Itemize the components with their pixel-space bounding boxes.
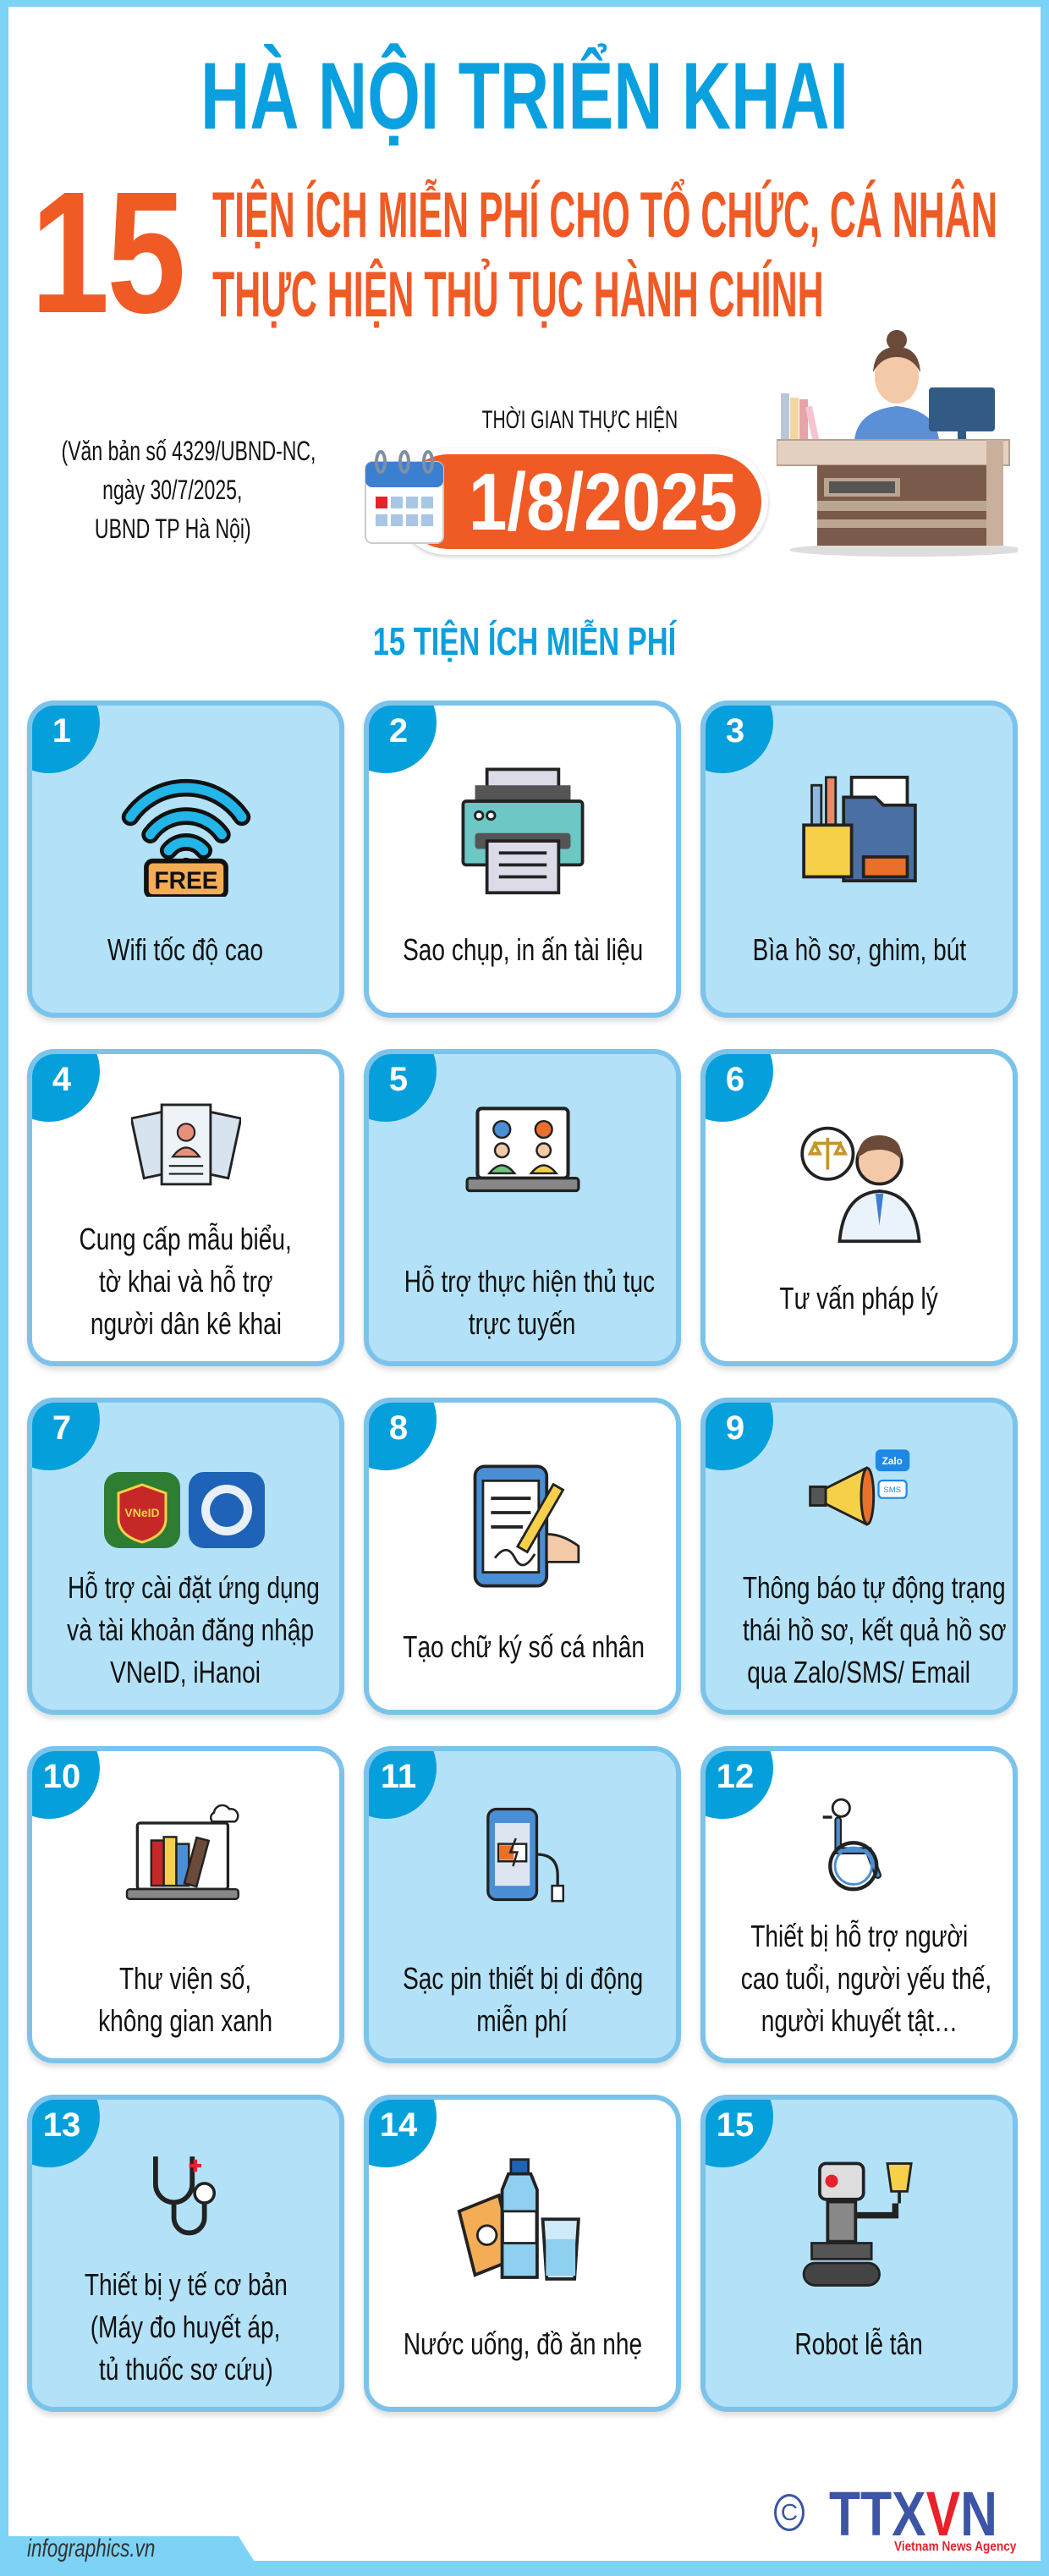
- card 14: [364, 2095, 681, 2412]
- card 13: 13: [43, 2106, 80, 2144]
- icon: apps VNeID iHanoi: VNeID: [124, 1506, 160, 1519]
- note: document reference: UBND TP Hà Nội): [95, 514, 250, 544]
- card 1: 1: [52, 712, 71, 750]
- logo: TTXVN: [774, 2479, 1017, 2554]
- icon: wifi free: FREE: [154, 867, 218, 894]
- label: và tài khoản đăng nhập: [67, 1612, 314, 1647]
- card 7: [27, 1398, 344, 1715]
- label: Thông báo tự động trạng: [743, 1570, 1006, 1605]
- icon: megaphone zalo sms: SMS: [883, 1486, 901, 1495]
- label: implementation time: THỜI GIAN THỰC HIỆN: [482, 406, 678, 434]
- illustration: receptionist at desk: [777, 330, 1018, 557]
- card 12: 12: [717, 1758, 754, 1795]
- label: Wifi tốc độ cao: [107, 932, 264, 967]
- label: trực tuyến: [469, 1306, 576, 1341]
- label: Thiết bị hỗ trợ người: [750, 1919, 968, 1953]
- card 8: 8: [389, 1409, 408, 1447]
- logo: TTXVN: TTXVN: [829, 2479, 997, 2549]
- label: tủ thuốc sơ cứu): [99, 2352, 272, 2387]
- card 7: 7: [52, 1409, 71, 1447]
- subtitle: [212, 179, 997, 331]
- card 3: 3: [726, 712, 744, 750]
- label: [98, 1961, 273, 2038]
- icon: phone charging: [486, 1807, 564, 1902]
- icon: forms: [131, 1103, 241, 1186]
- icon: digital library: [125, 1804, 239, 1900]
- date pill: 1/8/2025: [469, 457, 738, 547]
- label: Sao chụp, in ấn tài liệu: [403, 932, 643, 967]
- label: thái hồ sơ, kết quả hồ sơ: [743, 1612, 1007, 1647]
- icon: megaphone zalo sms: [809, 1449, 910, 1526]
- label: VNeID, iHanoi: [111, 1655, 261, 1689]
- label: [403, 1961, 643, 2038]
- note: document reference: ngày 30/7/2025,: [102, 475, 243, 505]
- label: Robot lễ tân: [795, 2326, 923, 2361]
- label: Cung cấp mẫu biểu,: [80, 1222, 292, 1256]
- card 15: [700, 2095, 1018, 2412]
- card 4: 4: [52, 1061, 71, 1098]
- card 9: 9: [726, 1409, 744, 1447]
- big number 15: 15: [30, 156, 183, 349]
- card 2: 2: [389, 712, 408, 750]
- note: document reference: [62, 436, 316, 544]
- label: cao tuổi, người yếu thế,: [741, 1961, 991, 1996]
- label: Sạc pin thiết bị di động: [403, 1961, 643, 1996]
- section heading: 15 TIỆN ÍCH MIỄN PHÍ: [373, 619, 676, 663]
- icon: stethoscope: [153, 2156, 216, 2235]
- icon: megaphone zalo sms: Zalo: [882, 1456, 903, 1467]
- subtitle: THỰC HIỆN THỦ TỤC HÀNH CHÍNH: [212, 259, 824, 331]
- label: tờ khai và hỗ trợ: [99, 1264, 272, 1299]
- card 4: [27, 1049, 344, 1366]
- label: [743, 1570, 1007, 1689]
- date pill: [394, 448, 768, 555]
- card 15: 15: [717, 2106, 754, 2144]
- label: Nước uống, đồ ăn nhẹ: [403, 2326, 642, 2361]
- label: (Máy đo huyết áp,: [91, 2310, 281, 2344]
- footer tab: infographics.vn: [8, 2536, 255, 2563]
- label: người khuyết tật…: [761, 2003, 958, 2038]
- card 5: [364, 1049, 681, 1366]
- label: miễn phí: [477, 2003, 568, 2038]
- icon: digital signature: [474, 1465, 580, 1587]
- label: Thiết bị y tế cơ bản: [84, 2267, 288, 2302]
- card 14: 14: [380, 2106, 417, 2144]
- icon: folder pens: [802, 775, 917, 882]
- icon: printer: [462, 768, 584, 895]
- card 11: [364, 1746, 681, 2063]
- label: Tư vấn pháp lý: [780, 1281, 938, 1315]
- label: [84, 2267, 288, 2387]
- label: không gian xanh: [98, 2003, 273, 2038]
- label: [741, 1919, 991, 2038]
- footer tab: infographics.vn: infographics.vn: [27, 2535, 155, 2562]
- card 10: 10: [43, 1758, 80, 1795]
- icon: reception robot: [802, 2162, 913, 2287]
- icon: wheelchair: [822, 1799, 881, 1892]
- icon: wifi free: [122, 778, 250, 897]
- icon: laptop online: [465, 1107, 580, 1193]
- label: Hỗ trợ cài đặt ứng dụng: [68, 1570, 320, 1605]
- card 1: [27, 700, 344, 1018]
- card 10: [27, 1746, 344, 2063]
- card 11: 11: [381, 1758, 416, 1795]
- icon: calendar: [365, 450, 444, 544]
- label: [404, 1264, 655, 1341]
- card 9: [700, 1398, 1018, 1715]
- card 6: [700, 1049, 1018, 1366]
- card 8: [364, 1398, 681, 1715]
- icon: legal advisor: [800, 1127, 921, 1244]
- card 6: 6: [726, 1061, 744, 1098]
- label: người dân kê khai: [90, 1306, 282, 1341]
- label: Tạo chữ ký số cá nhân: [403, 1629, 645, 1664]
- icon: water and snacks: [457, 2158, 580, 2281]
- card 13: [27, 2095, 344, 2412]
- label: Thư viện số,: [119, 1961, 252, 1996]
- label: [80, 1222, 292, 1341]
- icon: apps VNeID iHanoi: [104, 1472, 265, 1548]
- card 5: 5: [389, 1061, 408, 1098]
- title: HÀ NỘI TRIỂN KHAI: [200, 43, 849, 149]
- note: document reference: (Văn bản số 4329/UBND-NC,: [62, 436, 316, 466]
- subtitle: TIỆN ÍCH MIỄN PHÍ CHO TỔ CHỨC, CÁ NHÂN: [212, 179, 997, 251]
- label: Bìa hồ sơ, ghim, bút: [752, 932, 966, 967]
- label: qua Zalo/SMS/ Email: [748, 1655, 970, 1689]
- logo: TTXVN: C: [781, 2499, 798, 2525]
- label: [67, 1570, 320, 1689]
- card 2: [364, 700, 681, 1018]
- logo: TTXVN: Vietnam News Agency: [894, 2540, 1016, 2554]
- card 3: [700, 700, 1018, 1018]
- label: Hỗ trợ thực hiện thủ tục: [404, 1264, 655, 1299]
- card 12: [700, 1746, 1018, 2063]
